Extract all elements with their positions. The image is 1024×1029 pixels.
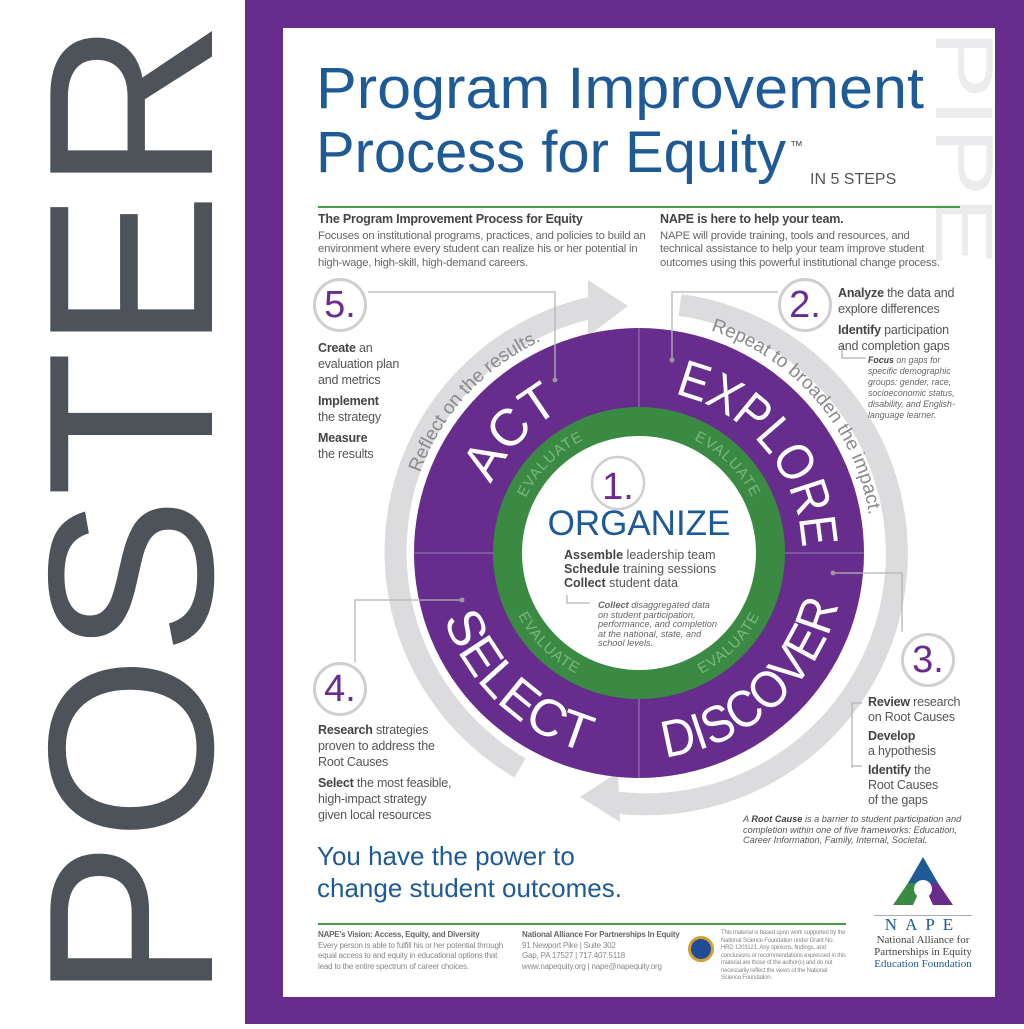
cycle diagram: EVALUATE	[518, 611, 580, 673]
footer	[318, 923, 846, 925]
step 4: high-impact strategy	[318, 792, 427, 806]
text: This material is based upon work supported by the National Science Foundation under Grant No. HRD 1203121. Any opinions, findings, and conclusions or recommendations expressed in this material are those of the author(s) and do not necessarily reflect the views of the National Science Foundation.	[721, 930, 846, 981]
NAPE logo: NAPE	[885, 915, 961, 934]
text: www.napequity.org | nape@napequity.org	[522, 962, 662, 970]
cycle diagram: SELECT	[448, 611, 596, 748]
step 3: a hypothesis Identify the	[868, 744, 936, 777]
step 3	[742, 633, 962, 845]
intro right: NAPE will provide training, tools and resources, and technical assistance to help your team improve student outcomes using this powerful institutional change process.	[660, 230, 940, 268]
title: Program Improvement	[316, 56, 924, 121]
purple ring	[414, 328, 864, 778]
NAPE logo	[874, 857, 972, 970]
cycle diagram: Collect student data	[564, 576, 678, 590]
step 2: Focus on gaps for specific demographic groups: gender, race, socioeconomic status, disability, and English-language learner.	[868, 355, 955, 420]
step 2: 2.	[789, 284, 821, 326]
cycle diagram: EXPLORE	[678, 360, 838, 546]
step 5	[313, 278, 399, 461]
cycle diagram: EVALUATE	[695, 431, 760, 496]
tagline: change student outcomes.	[317, 873, 622, 903]
intro left: The Program Improvement Process for Equity	[318, 212, 583, 226]
step 4: Root Causes Select the most feasible,	[318, 755, 451, 790]
cycle diagram: Schedule training sessions	[564, 562, 716, 576]
title: Process for Equity	[316, 120, 786, 185]
cycle diagram: Repeat to broaden the impact.	[712, 318, 880, 514]
step 3: of the gaps	[868, 793, 928, 807]
text: Gap, PA 17527 | 717.407.5118	[522, 951, 625, 960]
gray arrows	[396, 305, 897, 804]
step 2: explore differences Identify participation	[838, 302, 949, 337]
step 2: and completion gaps	[838, 339, 950, 353]
text: Every person is able to fulfill his or her potential through equal access to and equity in educational options that lead to the entire spectrum of career choices.	[318, 940, 503, 970]
step 3: Root Causes	[868, 778, 938, 792]
cycle diagram: ORGANIZE	[548, 504, 730, 543]
cycle diagram: on student participation,	[598, 610, 696, 620]
intro right: NAPE is here to help your team.	[660, 212, 843, 226]
step 4: 4.	[324, 668, 356, 710]
step 5: Create an	[318, 341, 372, 355]
poster sheet	[283, 28, 995, 997]
step 5: the strategy Measure	[318, 410, 381, 445]
text: National Alliance For Partnerships In Equity	[522, 930, 680, 939]
step 3: Review research	[868, 695, 960, 709]
cycle diagram	[354, 280, 908, 822]
step 2	[778, 278, 955, 420]
NAPE logo: Education Foundation	[874, 958, 972, 970]
purple frame	[245, 0, 1024, 1024]
step 4: Research strategies	[318, 723, 428, 737]
connectors	[355, 292, 902, 768]
title: IN 5 STEPS	[810, 171, 896, 188]
cycle diagram: Assemble leadership team	[564, 548, 715, 562]
cycle diagram: EVALUATE	[697, 612, 759, 674]
center 1	[592, 457, 644, 509]
cycle diagram: 1.	[602, 466, 634, 508]
cycle diagram: at the national, state, and	[598, 629, 702, 639]
text: the results	[318, 447, 373, 461]
step 4: proven to address the	[318, 739, 435, 753]
title: ™	[790, 138, 803, 153]
cycle diagram: ACT	[467, 380, 550, 484]
NAPE logo: National Alliance for	[877, 934, 969, 946]
text: 91 Newport Pike | Suite 302	[522, 940, 616, 950]
cycle diagram: Collect disaggregated data	[598, 600, 710, 610]
intro left: Focuses on institutional programs, practices, and policies to build an environment where every student can realize his or her potential in high-wage, high-skill, high-demand careers.	[318, 230, 646, 268]
tagline: You have the power to	[317, 841, 575, 871]
step 3: on Root Causes Develop	[868, 710, 955, 743]
cycle diagram: DISCOVER	[662, 598, 838, 758]
step 5: 5.	[324, 284, 356, 326]
step 3: 3.	[912, 639, 944, 681]
step 4	[313, 662, 451, 822]
intro left	[318, 212, 646, 268]
text: given local resources	[318, 808, 431, 822]
tagline	[317, 841, 622, 903]
text: NAPE's Vision: Access, Equity, and Diversity	[318, 930, 479, 939]
NAPE logo: Partnerships in Equity	[874, 946, 972, 958]
step 3: A Root Cause is a barrier to student participation and completion within one of five frameworks: Education, Career Information, Family, Internal, Societal.	[743, 814, 961, 845]
title	[316, 56, 924, 188]
step 2: Analyze the data and	[838, 286, 954, 300]
step 5: and metrics Implement	[318, 373, 380, 408]
cycle diagram: EVALUATE	[517, 432, 582, 497]
cycle diagram: school levels.	[598, 638, 653, 648]
cycle diagram: performance, and completion	[597, 619, 717, 629]
step 5: evaluation plan	[318, 357, 399, 371]
intro right	[660, 212, 940, 268]
cycle diagram: Reflect on the results.	[408, 335, 540, 472]
